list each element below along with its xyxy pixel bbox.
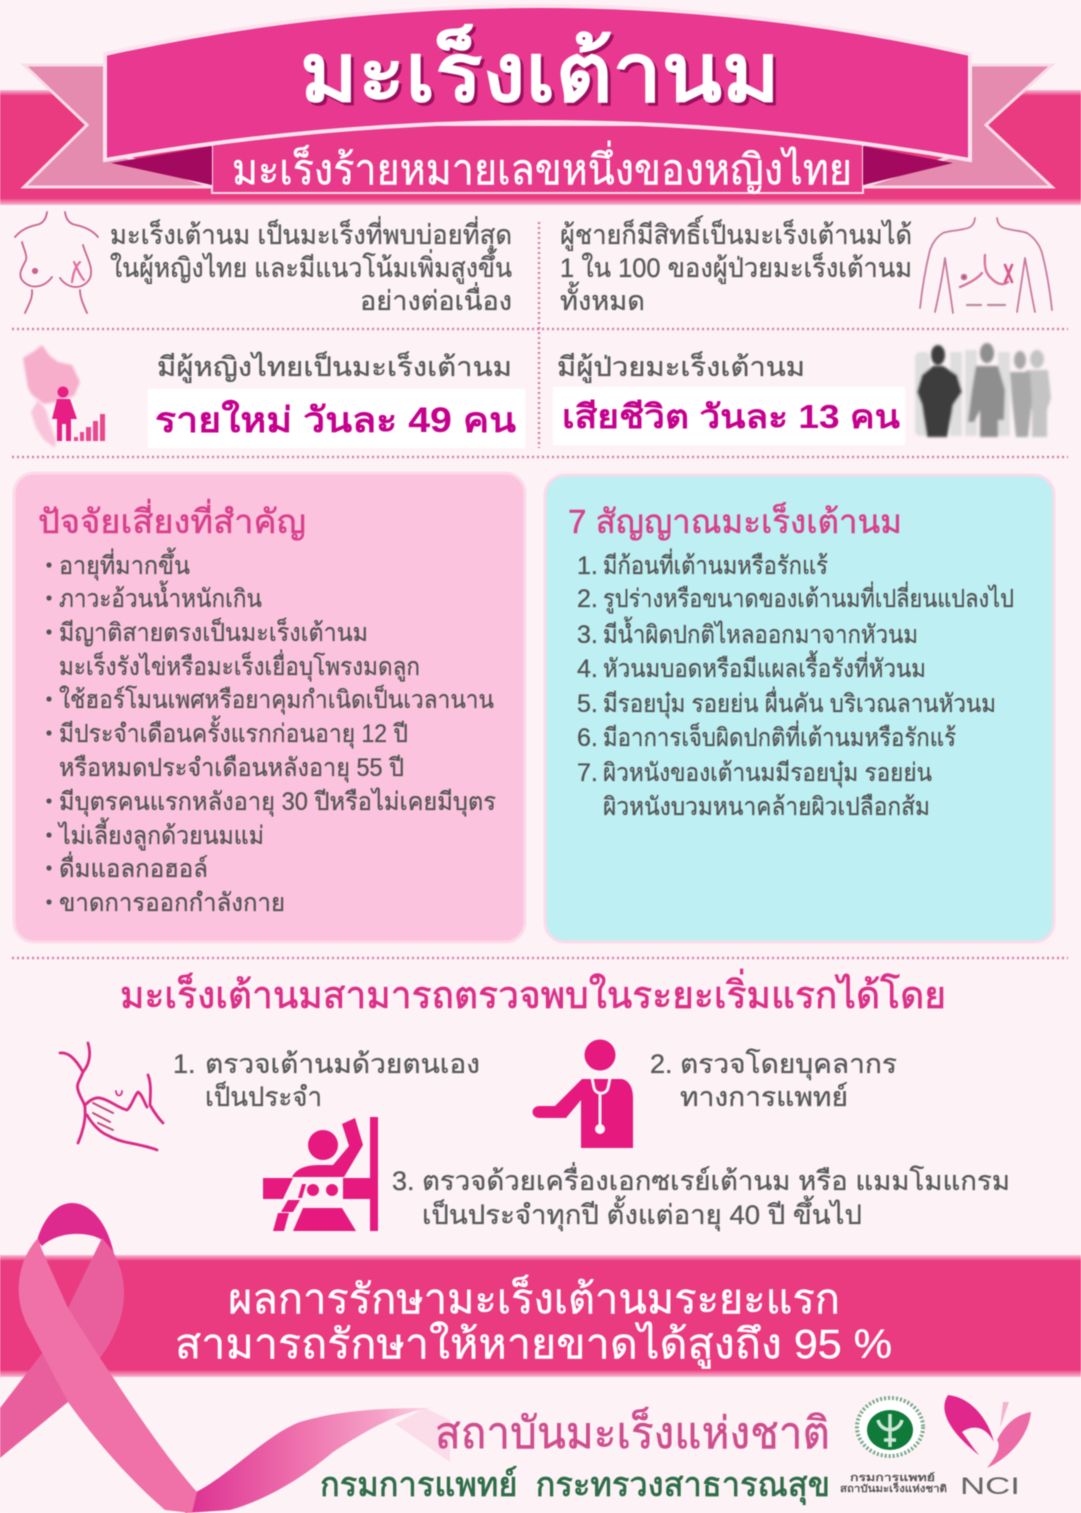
ribbon top fold (37, 1203, 114, 1254)
stat left: มีผู้หญิงไทยเป็นมะเร็งเต้านม (157, 349, 512, 383)
signs list: 3. (577, 621, 598, 649)
ribbon fold right (863, 146, 953, 185)
dotted dividers (12, 222, 1068, 958)
text: step 1: ตรวจเต้านมด้วยตนเอง (205, 1049, 480, 1079)
signs list: ผิวหนังบวมหนาคล้ายผิวเปลือกส้ม (603, 793, 930, 821)
risk list: อายุที่มากขึ้น (59, 547, 190, 581)
risk list: มีบุตรคนแรกหลังอายุ 30 ปีหรือไม่เคยมีบุตร (59, 787, 496, 817)
icon: breast self-exam hands (60, 1043, 163, 1150)
signs list: 7. (577, 759, 598, 787)
footer text: กรมการแพทย์ กระทรวงสาธารณสุข (320, 1466, 830, 1505)
text: step 2: ตรวจโดยบุคลากร (680, 1049, 897, 1081)
heading: 7 สัญญาณมะเร็งเต้านม (568, 502, 902, 540)
stat right (553, 349, 905, 445)
white box (148, 389, 525, 448)
text: intro right: 1 ใน 100 ของผู้ป่วยมะเร็งเต้านม (560, 250, 912, 284)
text: intro left: ในผู้หญิงไทย และมีแนวโน้มเพิ่มสูงขึ้น (110, 248, 512, 284)
footer text (320, 1407, 830, 1505)
icon: Thailand map with woman and bars (23, 345, 105, 448)
white box (553, 387, 905, 445)
text: step 3: 3. (392, 1166, 415, 1196)
result band: สามารถรักษาให้หายขาดได้สูงถึง 95 % (175, 1321, 892, 1369)
icon: male torso (920, 218, 1052, 313)
signs list: มีอาการเจ็บผิดปกติที่เต้านมหรือรักแร้ (603, 720, 956, 752)
logo: NCI butterfly: NCI (960, 1473, 1020, 1500)
ribbon tail pale end (395, 1408, 450, 1462)
signs list: 5. (577, 690, 598, 718)
risk list: มะเร็งรังไข่หรือมะเร็งเยื่อบุโพรงมดลูก (59, 649, 420, 682)
signs list (577, 548, 1014, 821)
signs list: รูปร่างหรือขนาดของเต้านมที่เปลี่ยนแปลงไป (603, 581, 1014, 614)
ribbon tail (185, 1408, 432, 1513)
icon: doctor (532, 1040, 633, 1148)
ribbon tail left (24, 65, 212, 187)
text: step 1 (173, 1049, 480, 1112)
heading: early detection: มะเร็งเต้านมสามารถตรวจพบในระยะเริ่มแรกได้โดย (120, 969, 946, 1017)
main ribbon (105, 6, 970, 160)
stat value: เสียชีวิต วันละ 13 คน (562, 398, 900, 435)
text: intro left: อย่างต่อเนื่อง (360, 282, 512, 316)
text: step 3: ตรวจด้วยเครื่องเอกซเรย์เต้านม หรือ แมมโมแกรม (422, 1162, 1010, 1196)
bars (74, 414, 105, 441)
risk list: ไม่เลี้ยงลูกด้วยนมแม่ (57, 817, 264, 851)
panel: seven warning signs (545, 475, 1054, 942)
risk list: มีญาติสายตรงเป็นมะเร็งเต้านม (59, 617, 368, 647)
text: intro left: มะเร็งเต้านม เป็นมะเร็งที่พบบ่อยที่สุด (110, 216, 512, 252)
text: intro right (560, 215, 912, 316)
signs list: มีรอยบุ๋ม รอยย่น ผื่นคัน บริเวณลานหัวนม (603, 686, 996, 719)
footer text: สถาบันมะเร็งแห่งชาติ (435, 1407, 830, 1458)
icon: silhouettes of women (915, 343, 1051, 437)
icon: female torso (15, 212, 98, 313)
text: step 3: เป็นประจำทุกปี ตั้งแต่อายุ 40 ปี ขึ้นไป (422, 1195, 862, 1232)
subtitle: มะเร็งร้ายหมายเลขหนึ่งของหญิงไทย (232, 141, 852, 194)
title: มะเร็งเต้านม (300, 23, 780, 119)
text: intro right: ผู้ชายก็มีสิทธิ์เป็นมะเร็งเต้านมได้ (560, 215, 912, 251)
icon: mammogram machine (263, 1117, 378, 1231)
logo: ministry of public health: สถาบันมะเร็งแห่งชาติ (840, 1481, 947, 1495)
risk list: หรือหมดประจำเดือนหลังอายุ 55 ปี (59, 754, 404, 783)
text: step 2: ทางการแพทย์ (680, 1081, 848, 1112)
risk list: มีประจำเดือนครั้งแรกก่อนอายุ 12 ปี (59, 715, 408, 749)
result band: ผลการรักษามะเร็งเต้านมระยะแรก (228, 1275, 840, 1322)
subtitle plate (212, 125, 863, 193)
text: step 2: 2. (650, 1049, 673, 1079)
text: intro right: ทั้งหมด (560, 281, 645, 316)
logo: ministry of public health: กรมการแพทย์ (850, 1472, 935, 1484)
ribbon right strand (19, 1238, 197, 1513)
ribbon tail right (863, 65, 1052, 187)
stat left (148, 349, 525, 448)
heading: ปัจจัยเสี่ยงที่สำคัญ (38, 499, 306, 540)
risk list: ขาดการออกกำลังกาย (59, 889, 285, 917)
risk list: ดื่มแอลกอฮอล์ (59, 851, 208, 883)
woman (52, 386, 77, 441)
text: step 1: 1. (173, 1049, 196, 1079)
signs list: 6. (577, 724, 598, 752)
logo: NCI butterfly (944, 1395, 1031, 1500)
ribbon fold left (111, 146, 212, 185)
signs list: 4. (577, 655, 598, 683)
stat value: รายใหม่ วันละ 49 คน (155, 399, 516, 440)
signs list: หัวนมบอดหรือมีแผลเรื้อรังที่หัวนม (603, 650, 926, 683)
text: step 1: เป็นประจำ (205, 1079, 322, 1112)
ribbon left strand (0, 1238, 124, 1458)
risk list: ใช้ฮอร์โมนเพศหรือยาคุมกำเนิดเป็นเวลานาน (59, 684, 494, 715)
result band (0, 1255, 1081, 1377)
signs list: 2. (577, 585, 598, 613)
text: step 2 (650, 1049, 897, 1112)
text: intro left (110, 216, 512, 316)
panel: risk factors (14, 473, 525, 942)
signs list: 1. (577, 552, 598, 580)
risk list (46, 547, 496, 917)
risk list: ภาวะอ้วนน้ำหนักเกิน (59, 580, 262, 613)
signs list: มีน้ำผิดปกติไหลออกมาจากหัวนม (603, 616, 918, 649)
signs list: ผิวหนังของเต้านมมีรอยบุ๋ม รอยย่น (603, 759, 932, 788)
signs list: มีก้อนที่เต้านมหรือรักแร้ (603, 548, 828, 580)
logo: ministry of public health (840, 1398, 947, 1495)
stat right: มีผู้ป่วยมะเร็งเต้านม (557, 349, 805, 383)
header banner (0, 6, 1081, 205)
text: step 3 (392, 1162, 1010, 1232)
icon: pink ribbon (0, 1203, 450, 1513)
